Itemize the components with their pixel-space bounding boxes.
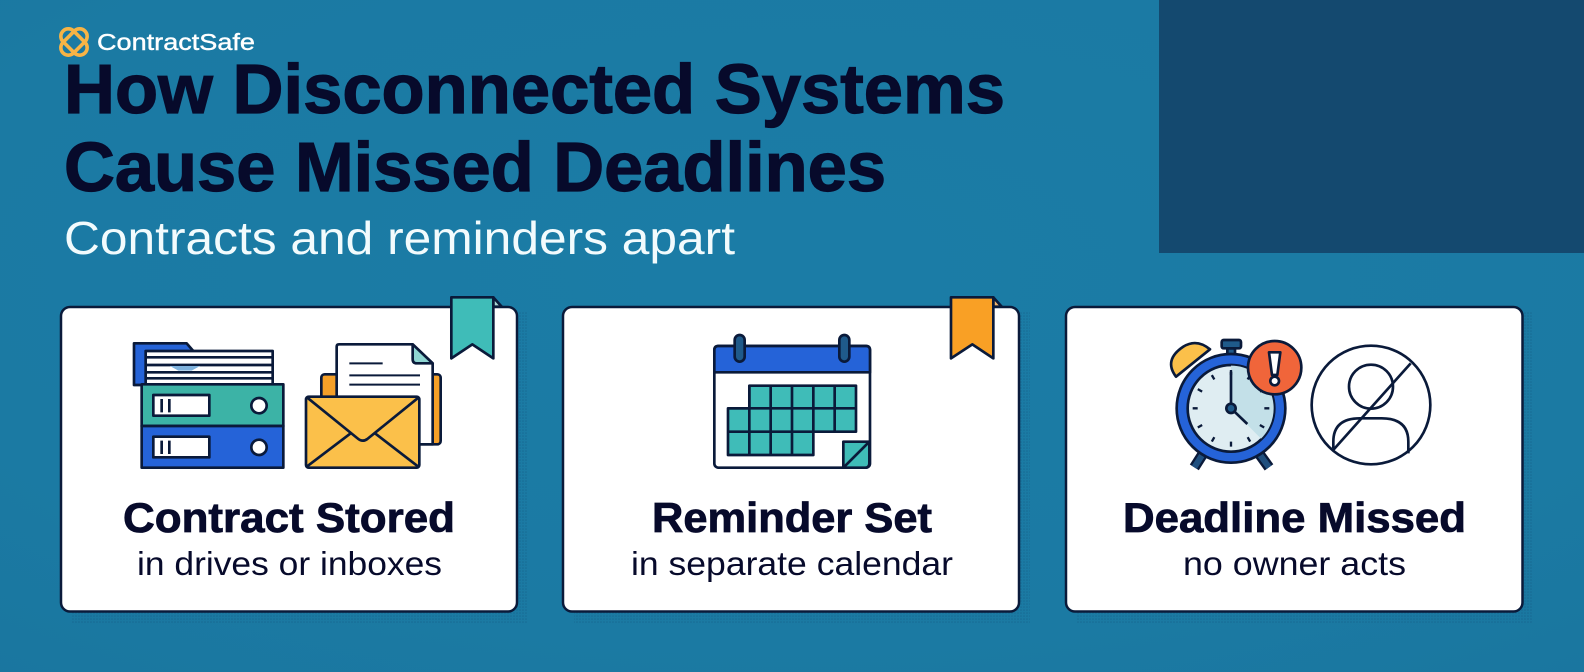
card caption: no owner acts [1183, 545, 1406, 582]
card caption: in separate calendar [631, 545, 953, 582]
card heading: Contract Stored [123, 494, 455, 541]
icon: alarm clock [1171, 340, 1285, 467]
icon: teal binder [142, 384, 283, 426]
icon: folder stack [134, 343, 273, 385]
icon: bookmark orange [951, 297, 1002, 358]
icon: alert badge [1248, 341, 1301, 394]
panel: deadline missed [1066, 307, 1533, 623]
panel: contract stored [61, 297, 528, 623]
icon: calendar page [714, 335, 870, 468]
card caption: in drives or inboxes [137, 545, 442, 582]
icon: logo mark [58, 26, 90, 58]
icon: envelope with document [306, 344, 441, 468]
icons: calendar [714, 297, 1002, 468]
icon: no owner [1312, 346, 1430, 464]
icon: bookmark teal [451, 297, 502, 358]
card heading: Deadline Missed [1123, 494, 1466, 541]
title: How Disconnected Systems [64, 50, 1005, 128]
logo: ContractSafe [58, 26, 255, 58]
icon: blue binder [142, 426, 283, 468]
dark corner block [1159, 0, 1584, 253]
logo wordmark: ContractSafe [97, 29, 255, 55]
icons: alarm clock and no owner [1171, 340, 1430, 467]
subtitle: Contracts and reminders apart [64, 212, 735, 264]
icons: binders and envelope [134, 297, 502, 468]
card heading: Reminder Set [652, 494, 932, 541]
panel: reminder set [563, 297, 1030, 623]
title: Cause Missed Deadlines [64, 128, 886, 206]
title [64, 50, 1005, 206]
